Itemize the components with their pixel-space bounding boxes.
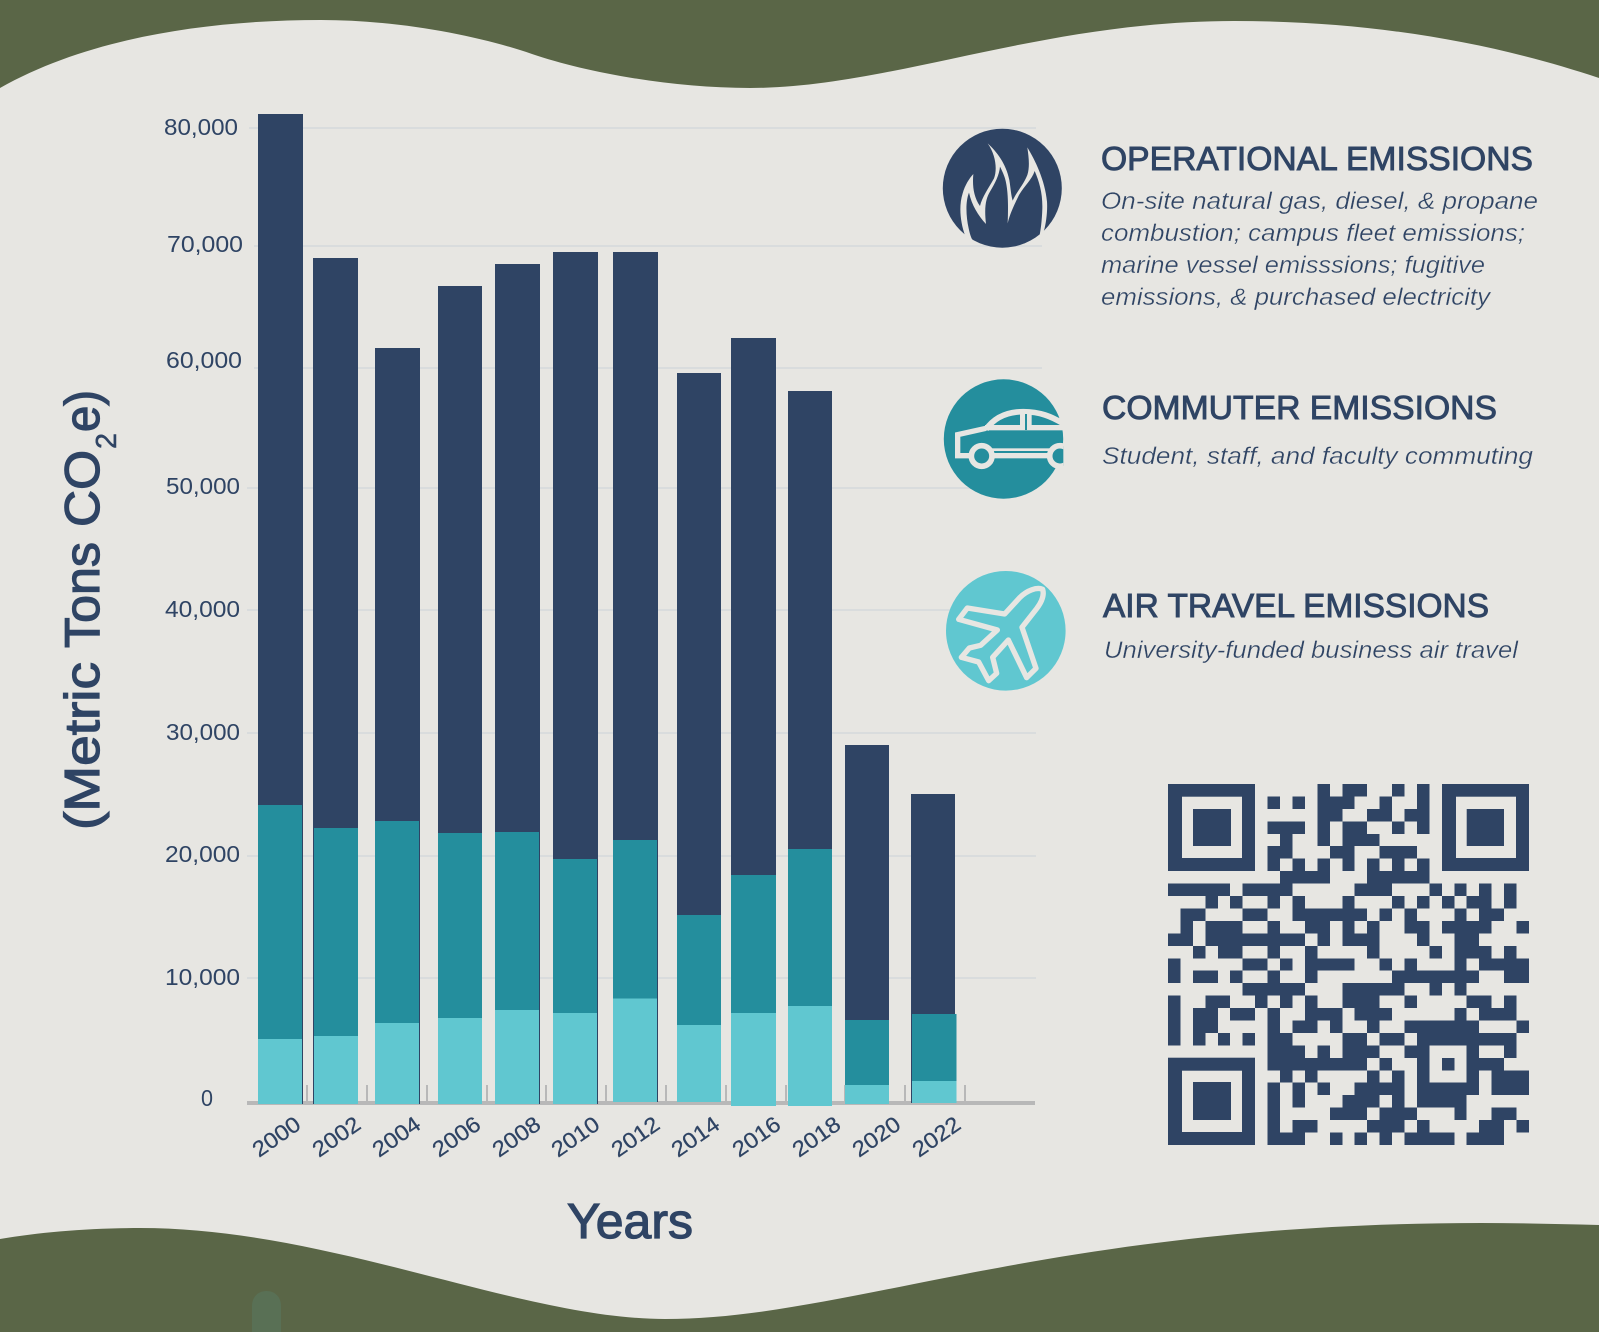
bar 2020 [845, 745, 889, 1104]
x axis year labels: 2010 [547, 1111, 604, 1162]
x axis year labels: 2018 [788, 1111, 845, 1162]
description: operational emissions: On-site natural gas, diesel, & propane [1101, 188, 1538, 215]
heading: commuter emissions: COMMUTER EMISSIONS [1102, 390, 1497, 427]
y axis title: (Metric [56, 662, 110, 830]
decorative pill shape in bottom band [252, 1291, 281, 1332]
bar 2008 [495, 264, 540, 1104]
y axis title [56, 390, 123, 830]
y axis tick labels: 0 [201, 1085, 213, 1111]
x axis year labels: 2014 [667, 1111, 724, 1162]
description: operational emissions [1101, 188, 1538, 311]
icon: airplane [946, 571, 1066, 691]
legend: air travel emissions [1103, 588, 1519, 664]
bar 2010 [553, 252, 598, 1104]
y axis tick labels: 10,000 [165, 964, 240, 990]
heading: operational emissions: OPERATIONAL EMISSIONS [1101, 141, 1533, 178]
x axis year labels: 2016 [728, 1111, 785, 1162]
bar 2016 [731, 338, 776, 1106]
x axis year labels: 2022 [908, 1111, 965, 1162]
x axis year labels: 2020 [848, 1111, 905, 1162]
description: air travel emissions: University-funded business air travel [1104, 637, 1519, 664]
gridlines [247, 127, 1042, 979]
bar 2012 [613, 252, 658, 1102]
icon: car [944, 379, 1070, 499]
stacked bar chart [258, 114, 956, 1106]
x axis year labels: 2004 [368, 1111, 425, 1162]
x axis year labels [248, 1111, 965, 1162]
legend: operational emissions [1101, 141, 1538, 311]
bar 2022 [911, 794, 956, 1103]
bar 2000 [258, 114, 303, 1104]
bar 2002 [313, 258, 358, 1104]
heading: air travel emissions: AIR TRAVEL EMISSIONS [1103, 588, 1489, 625]
legend: commuter emissions [1102, 390, 1533, 470]
y axis tick labels: 60,000 [166, 347, 242, 373]
x axis year labels: 2012 [607, 1111, 664, 1162]
x axis title: Years [567, 1195, 693, 1249]
icon: flame [943, 129, 1062, 248]
bar 2004 [375, 348, 420, 1104]
bar 2018 [788, 391, 832, 1106]
y axis tick labels: 30,000 [166, 719, 240, 745]
bar 2006 [438, 286, 482, 1104]
y axis tick labels: 80,000 [164, 114, 238, 140]
x axis year labels: 2000 [248, 1111, 305, 1162]
y axis tick labels: 70,000 [167, 231, 243, 257]
y axis tick labels: 50,000 [166, 473, 240, 499]
x axis line and ticks [247, 1085, 1035, 1105]
y axis title: CO [56, 450, 110, 527]
description: commuter emissions: Student, staff, and faculty commuting [1102, 443, 1533, 470]
y axis title: e) [56, 390, 110, 432]
x axis year labels: 2006 [428, 1111, 485, 1162]
y axis tick labels: 40,000 [165, 596, 240, 622]
y axis title: Tons [56, 542, 110, 648]
y axis title: 2 [91, 433, 123, 449]
description: operational emissions: emissions, & purchased electricity [1101, 284, 1492, 311]
bar 2014 [677, 373, 721, 1102]
description: operational emissions: marine vessel emisssions; fugitive [1101, 252, 1485, 279]
y axis tick labels: 20,000 [165, 841, 240, 867]
description: operational emissions: combustion; campus fleet emissions; [1101, 220, 1525, 247]
x axis year labels: 2008 [488, 1111, 545, 1162]
y axis tick labels [164, 114, 243, 1111]
QR code [1168, 784, 1529, 1145]
x axis year labels: 2002 [308, 1111, 365, 1162]
